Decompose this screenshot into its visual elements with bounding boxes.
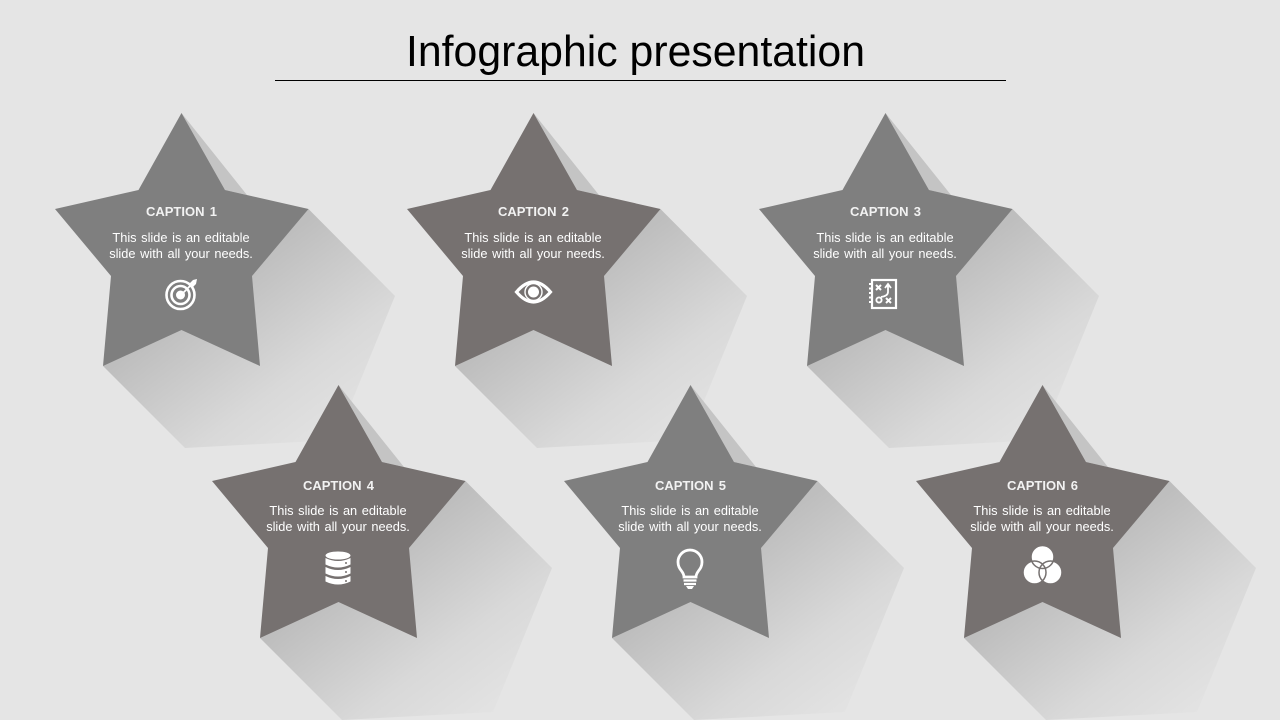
caption 1 text: This slide is an editable (112, 230, 250, 245)
shadow: card 6 (964, 385, 1256, 720)
star 3 (759, 113, 1012, 366)
icon: venn diagram (1023, 546, 1062, 584)
caption 5 text line 2: slide with all your needs. (618, 519, 762, 534)
caption 2 text: This slide is an editable (464, 230, 602, 245)
caption 6 heading: CAPTION 6 (1007, 478, 1078, 493)
caption 4 text: This slide is an editable (269, 503, 407, 518)
caption 6 text: This slide is an editable (973, 503, 1111, 518)
panel: caption 2 (407, 113, 660, 366)
panel: caption 6 (916, 385, 1170, 638)
caption 2 text line 2: slide with all your needs. (461, 246, 605, 261)
caption 2 heading: CAPTION 2 (498, 204, 569, 219)
icon: target (166, 279, 197, 309)
panel: caption 5 (564, 385, 818, 638)
caption 1 heading: CAPTION 1 (146, 204, 217, 219)
title underline (275, 80, 1006, 81)
panel: caption 4 (212, 385, 466, 638)
caption 5 heading: CAPTION 5 (655, 478, 726, 493)
star 6 (916, 385, 1170, 638)
star 4 (212, 385, 466, 638)
caption 4 text line 2: slide with all your needs. (266, 519, 410, 534)
shadow: card 5 (612, 385, 904, 720)
star 2 (407, 113, 660, 366)
shadow: card 4 (260, 385, 552, 720)
icon: database (326, 552, 350, 584)
star 5 (564, 385, 818, 638)
caption 3 heading: CAPTION 3 (850, 204, 921, 219)
shadow: card 1 (103, 113, 395, 448)
caption 1 text line 2: slide with all your needs. (109, 246, 253, 261)
icon: strategy notebook (869, 280, 896, 308)
icon: eye (516, 282, 550, 302)
star 1 (55, 113, 308, 366)
caption 3 text line 2: slide with all your needs. (813, 246, 957, 261)
shadow: card 3 (807, 113, 1099, 448)
icon: light bulb (678, 550, 702, 589)
caption 5 text: This slide is an editable (621, 503, 759, 518)
shadow: card 2 (455, 113, 747, 448)
caption 6 text line 2: slide with all your needs. (970, 519, 1114, 534)
title: Infographic presentation (406, 27, 865, 76)
caption 3 text: This slide is an editable (816, 230, 954, 245)
panel: caption 3 (759, 113, 1012, 366)
caption 4 heading: CAPTION 4 (303, 478, 375, 493)
panel: caption 1 (55, 113, 308, 366)
